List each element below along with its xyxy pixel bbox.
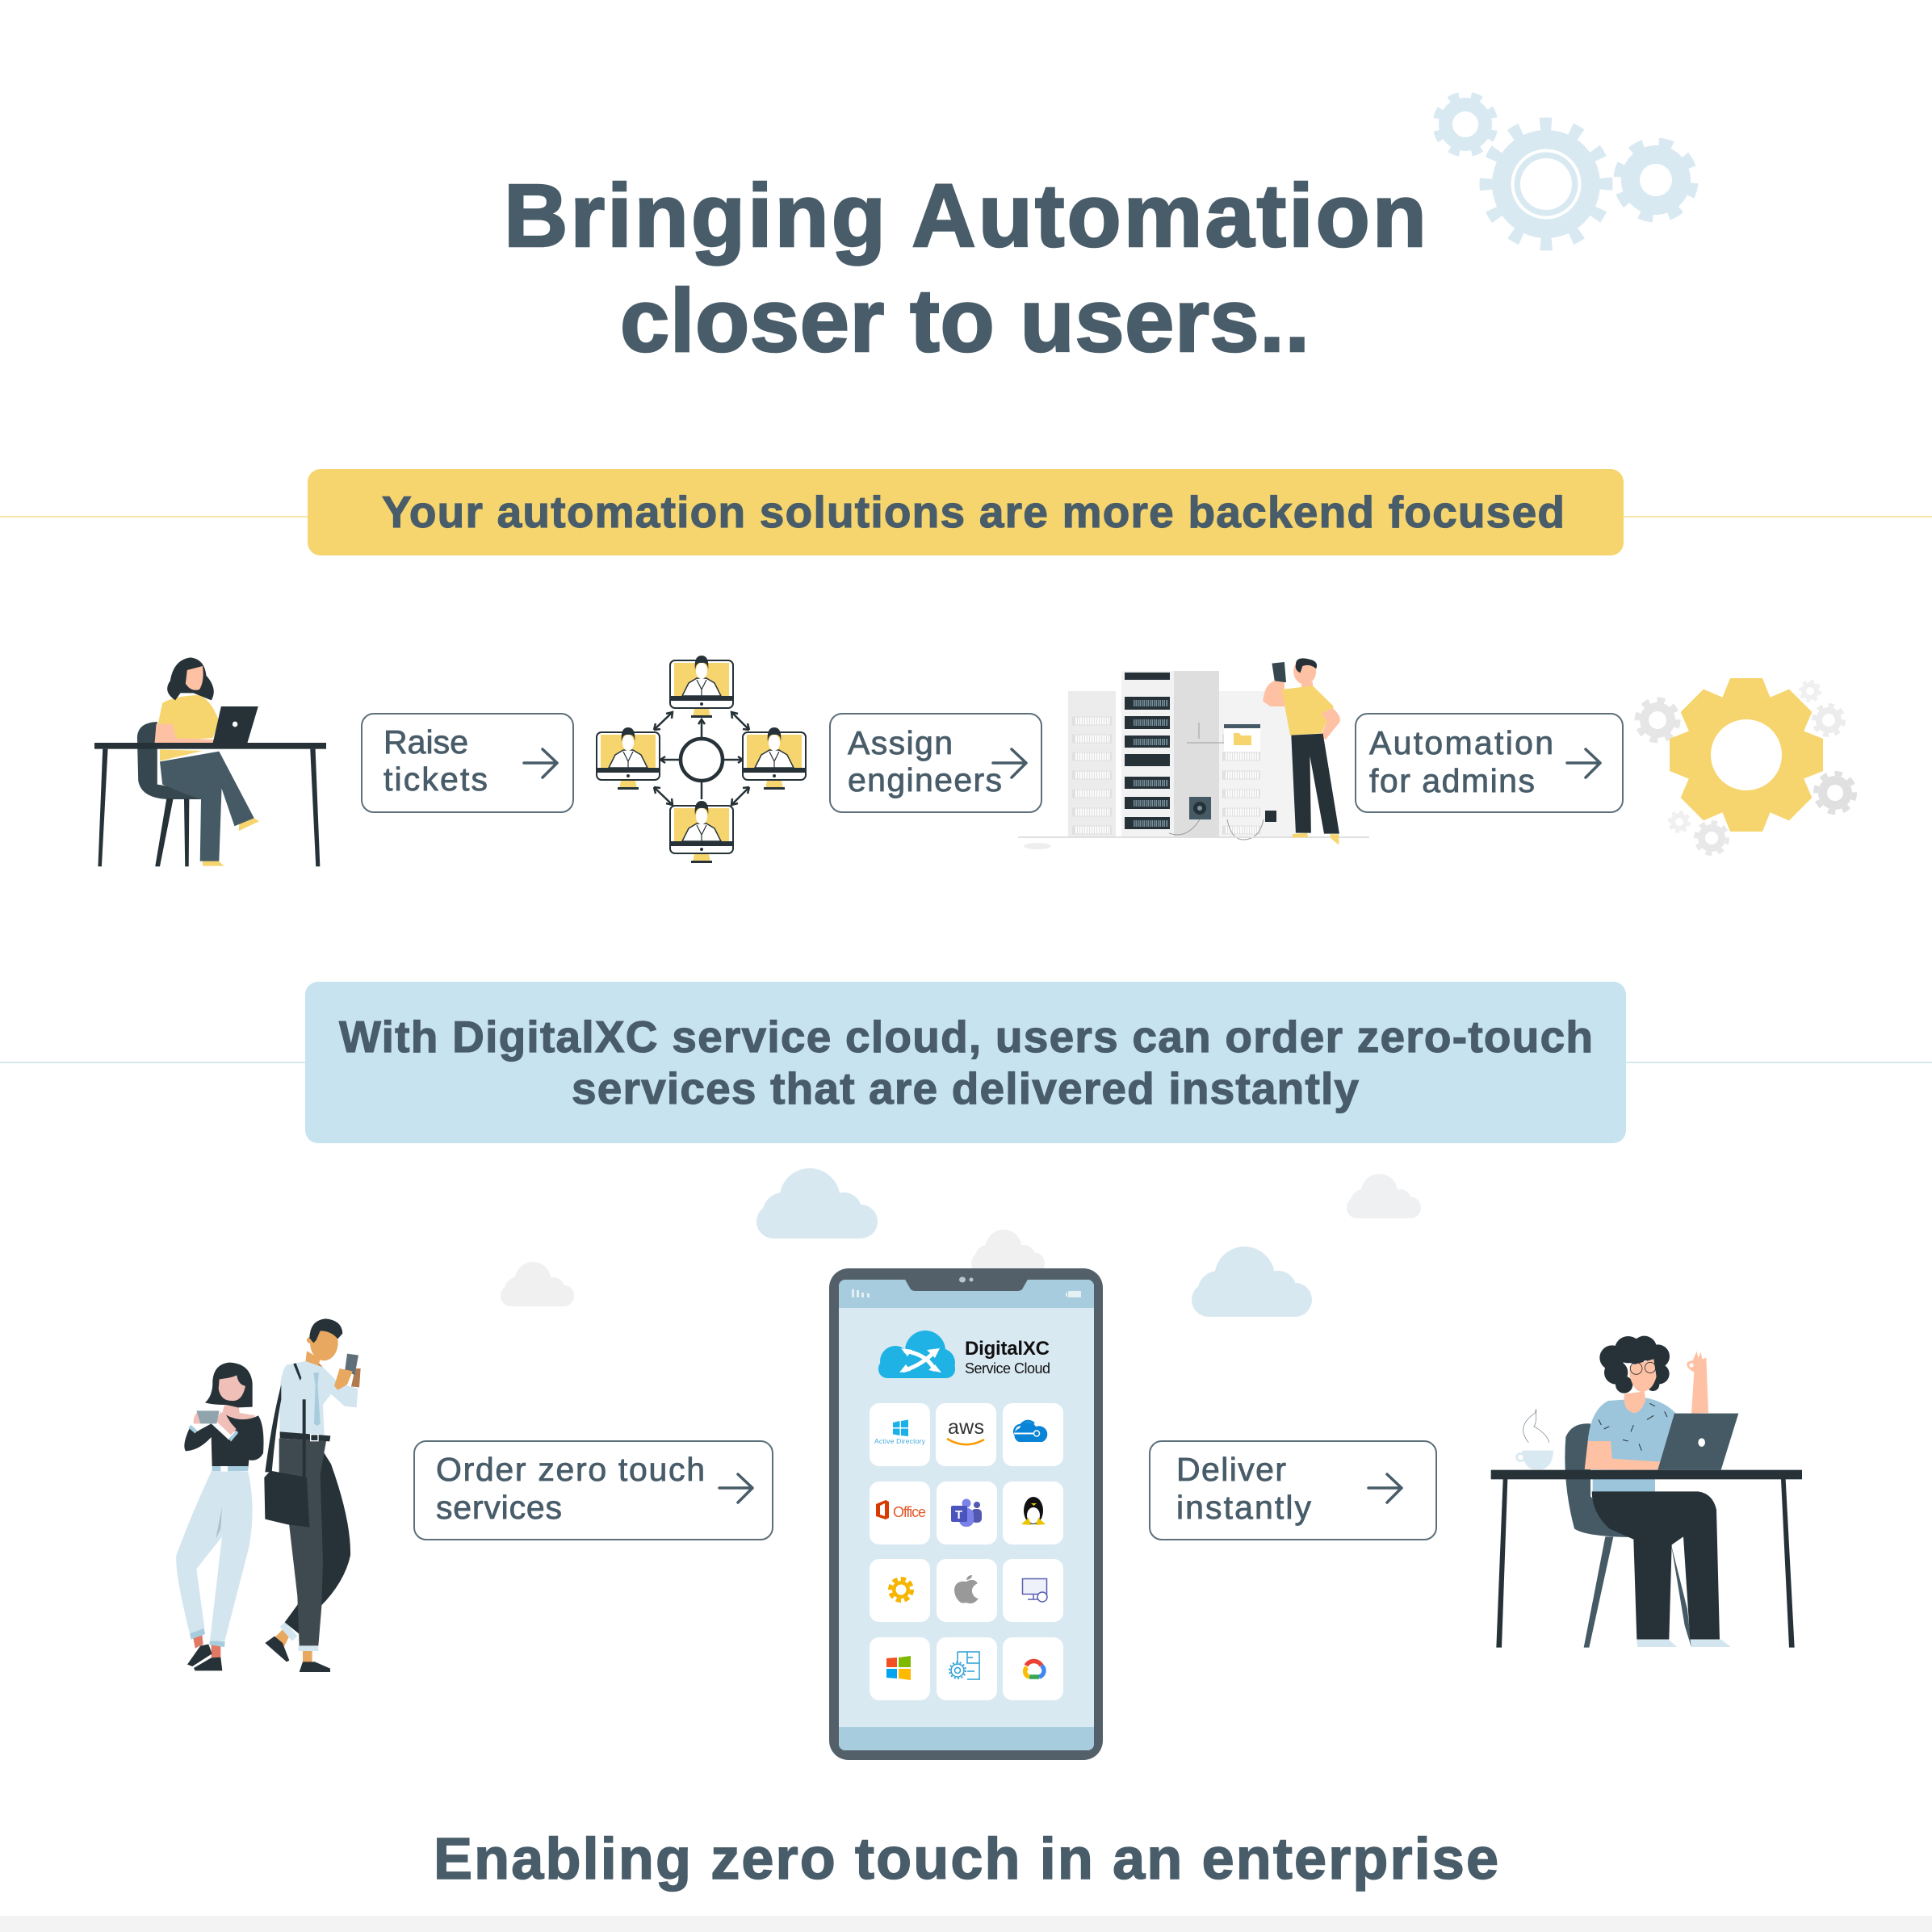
illustration: phone with service catalog [829,1268,1103,1760]
title [504,166,1427,371]
ground [1018,836,1369,838]
illustration: server racks with admin [1018,658,1369,849]
admin figure [1263,658,1340,845]
box: order zero touch services: Order zero touch [436,1451,705,1488]
title: Bringing Automation [504,166,1427,266]
icon: Azure cloud link [1014,1421,1047,1442]
banner: backend focused: Your automation solutions are more backend focused [382,487,1565,537]
box: order zero touch services [414,1441,773,1540]
raised arm [1687,1351,1708,1414]
box: assign engineers [830,714,1041,812]
logo: DigitalXC Service Cloud [878,1331,1050,1378]
icon: aws: aws [948,1416,984,1439]
hair [1599,1336,1670,1393]
cup [1522,1451,1553,1469]
icon: big gear centre [1486,124,1606,244]
woman [176,1363,264,1670]
title: closer to users.. [620,271,1310,371]
icon: Linux penguin [1021,1497,1046,1525]
tiles [870,1403,1063,1700]
icon: small gear left [1427,86,1503,162]
icon: Google Cloud [1025,1662,1044,1677]
laptop [1657,1414,1738,1470]
box: raise tickets: Raise [383,723,468,761]
box: order zero touch services: services [436,1489,562,1526]
icon: Active Directory: Active Directory [874,1437,926,1445]
icon: gear right [1609,133,1703,227]
icon: Office [876,1500,926,1520]
box: assign engineers: engineers [848,761,1002,798]
chair [1565,1423,1683,1537]
box: deliver instantly: instantly [1176,1489,1311,1526]
box: deliver instantly [1150,1441,1436,1540]
box: assign engineers: Assign [848,724,953,761]
icon: gray small gears [1637,681,1854,854]
logo: DigitalXC Service Cloud: Service Cloud [965,1360,1050,1377]
icon: Active Directory [874,1419,926,1445]
trousers [1592,1491,1720,1640]
box: automation for admins [1356,714,1623,812]
icon: Apple [954,1575,979,1603]
diagram: engineer network [597,656,806,863]
face [1629,1359,1657,1392]
desk [1491,1470,1802,1479]
icon: remote desktop [1022,1579,1047,1602]
icon: blue gears [1427,86,1703,244]
banner: DigitalXC service cloud: services that are delivered instantly [572,1063,1359,1113]
icon: puzzle automation [949,1652,979,1679]
illustration: couple with phones [176,1318,361,1672]
skin [1624,1391,1645,1413]
box: raise tickets [362,714,573,812]
icon: Teams: T [955,1508,962,1522]
banner: backend focused [308,469,1624,555]
icon: yellow settings gear [890,1579,912,1600]
banner: DigitalXC service cloud [305,982,1626,1143]
fan box [1189,797,1211,819]
box: automation for admins: Automation [1369,724,1553,761]
shoes [1637,1640,1731,1647]
bottom caption: Enabling zero touch in an enterprise [434,1827,1498,1892]
illustration: woman at desk [94,657,326,866]
icon: yellow gear [1670,678,1823,832]
box: automation for admins: for admins [1369,762,1535,799]
shirt [1588,1398,1677,1464]
icon: Windows [886,1656,911,1680]
illustration: person at desk with laptop [1491,1336,1802,1648]
icon: Office: Office [893,1504,926,1520]
logo: DigitalXC Service Cloud: DigitalXC [965,1338,1050,1360]
banner: DigitalXC service cloud: With DigitalXC service cloud, users can order zero-touch [339,1012,1593,1062]
bottom strip [0,1916,1932,1932]
folder window [1224,724,1260,752]
icon: Teams [951,1498,982,1527]
box: deliver instantly: Deliver [1176,1451,1286,1488]
clouds [501,1168,1421,1317]
box: raise tickets: tickets [383,761,488,798]
man [264,1318,361,1672]
connecting hub [681,739,723,781]
